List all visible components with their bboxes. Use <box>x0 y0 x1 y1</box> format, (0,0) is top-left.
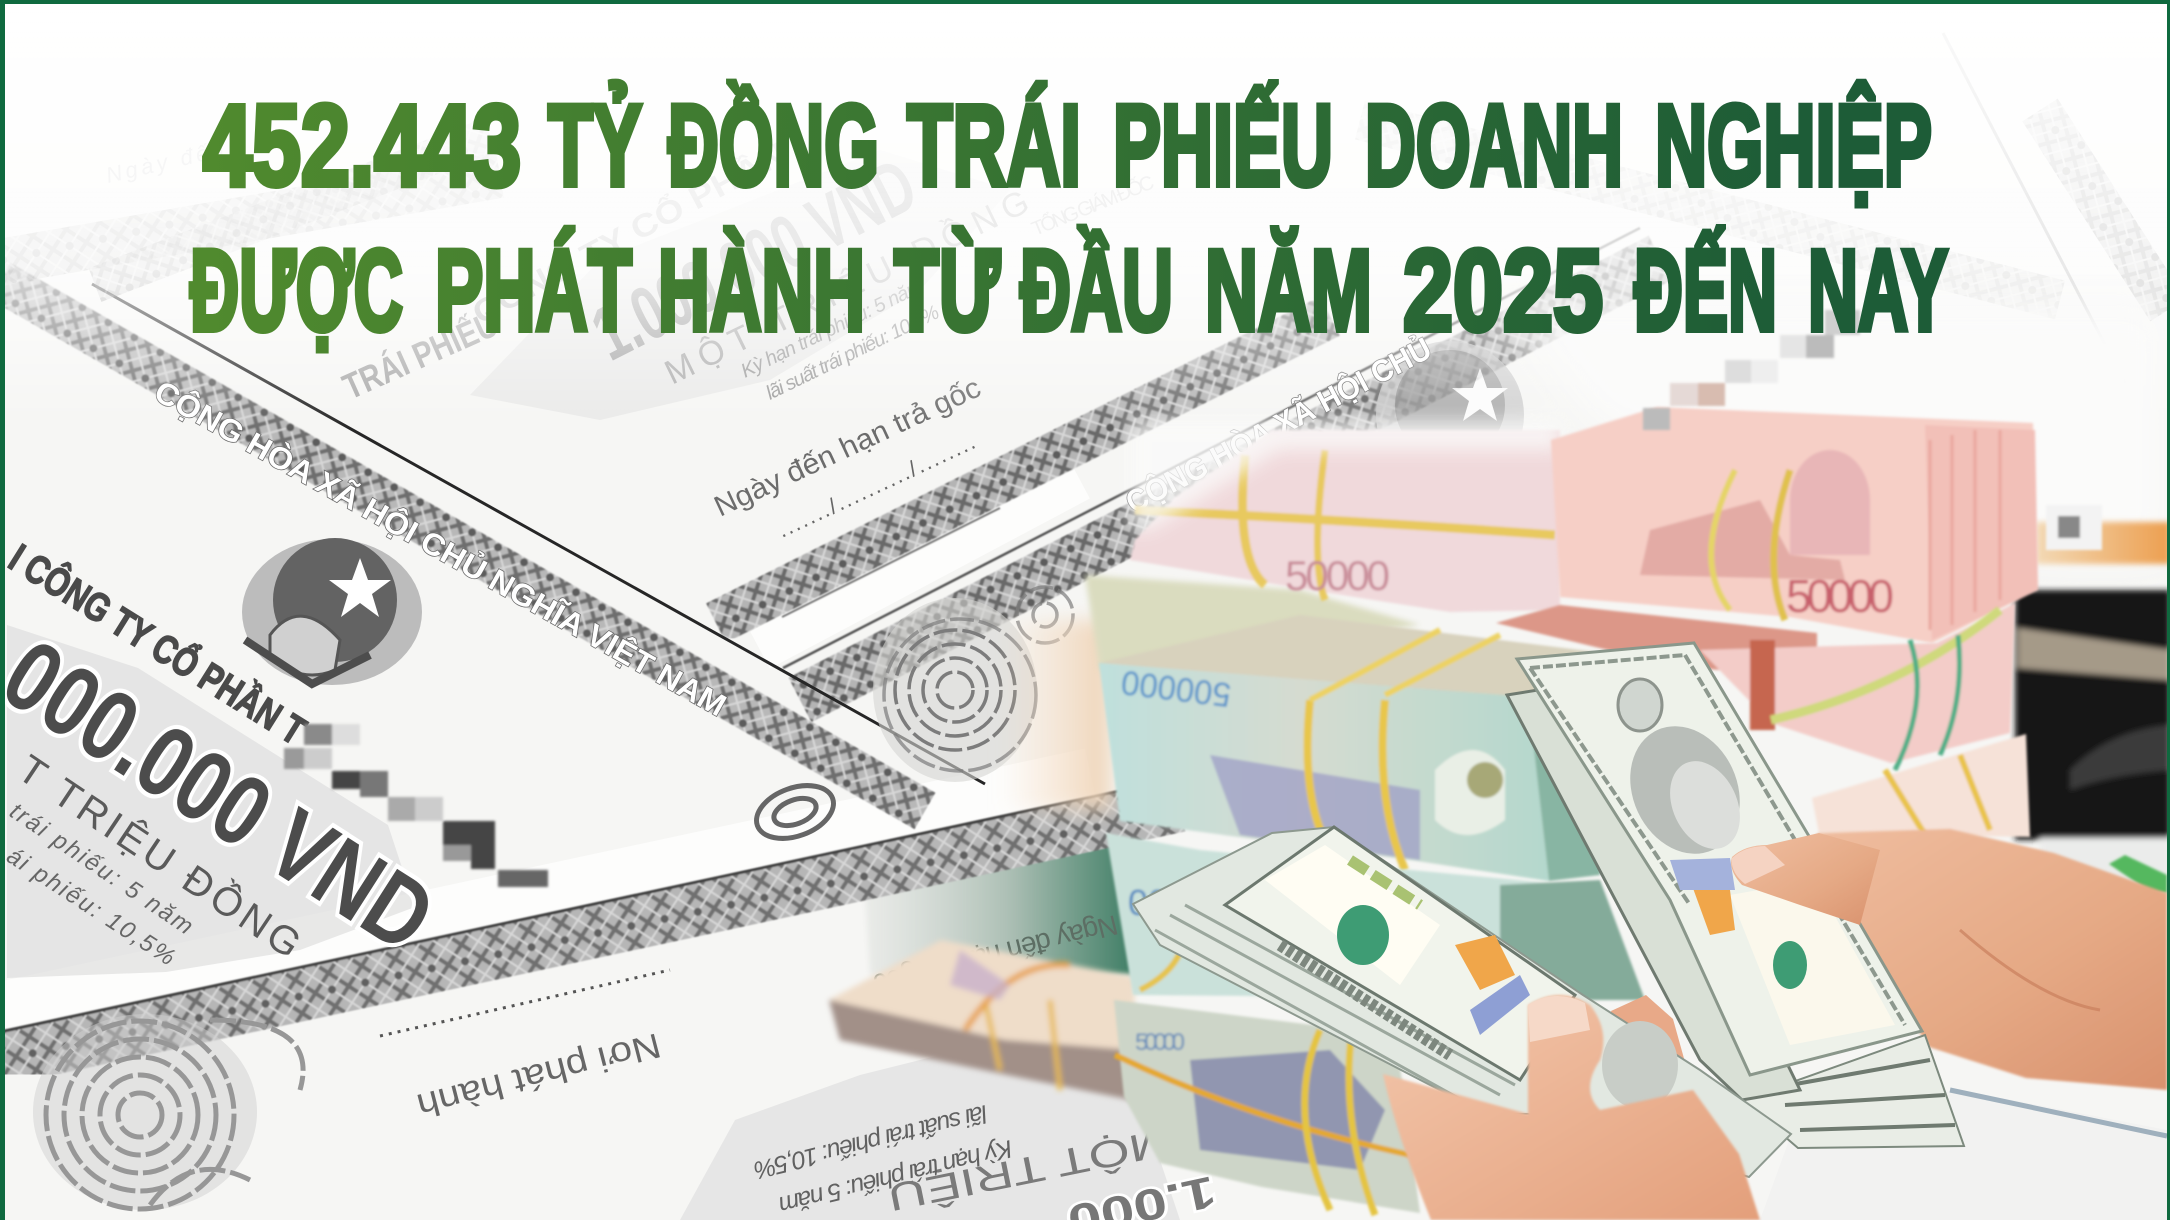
ornament: small seal <box>749 776 841 848</box>
text: lower words upside down: MỘT TRIỆU <box>884 1119 1177 1220</box>
bill: blue ribbon <box>1670 858 1735 890</box>
stack: green seal <box>1337 905 1389 965</box>
bill: green seal <box>1773 941 1807 989</box>
hand: left hand <box>1383 995 1760 1220</box>
overlay: washed top of certificates <box>0 0 2170 430</box>
rosette: lower certificate value <box>680 1040 1180 1220</box>
band: main left guilloche border <box>0 281 925 811</box>
text: maturity date: Ngày đến hạn trả gốc <box>709 372 986 523</box>
stack: edge lines <box>1155 905 1515 1110</box>
text: band motto left: CỘNG HÒA XÃ HỘI CHỦ NGHĨA VIỆT NAM <box>149 373 733 723</box>
object: green item <box>2109 855 2167 893</box>
stack: fine print <box>1280 945 1450 1055</box>
text: upper signature: TỔNG GIÁM ĐỐC <box>1028 170 1157 241</box>
text: upper rate: lãi suất trái phiếu: 10,5% <box>763 301 943 404</box>
stack: green letters <box>1350 860 1420 905</box>
bundle: large teal cash: 500000 <box>1119 663 1233 714</box>
title line 1: NGHIỆP <box>1655 82 1932 210</box>
stack: orange patch <box>1455 935 1515 990</box>
bundle: small pink stack <box>829 940 1135 1100</box>
title line 2: TỪ <box>894 227 1000 355</box>
cash: dollar fan <box>1507 643 1964 1148</box>
bill: orange patch <box>1690 880 1735 935</box>
bundle: blurred peach backdrop <box>1000 620 1110 810</box>
rosette: value background <box>7 625 415 978</box>
stack: cream panel <box>1265 845 1440 985</box>
line: diagonal paper edge <box>92 284 985 784</box>
bill: main bill <box>1517 643 1922 1075</box>
text: face value in words: T TRIỆU ĐỒNG <box>10 745 310 967</box>
hand: right palm <box>1760 829 2167 1090</box>
text: term: trái phiếu: 5 năm <box>5 798 198 940</box>
title line 2: PHÁT <box>435 227 632 355</box>
text: maturity dots: ......./........../........ <box>774 429 979 543</box>
text: due date over stack: Ngày đến hạn trả gốc <box>871 909 1121 1000</box>
bundle: faded dark green stack behind band <box>865 832 1135 975</box>
ornament: lower left swirl <box>33 1014 303 1210</box>
title line 1 <box>203 82 1932 210</box>
emblem: right national emblem <box>1376 341 1524 489</box>
censored blocks: left <box>284 724 548 887</box>
emblem: left national emblem <box>242 538 422 685</box>
strip: white paper margin between upper bands <box>760 480 1080 650</box>
text: issue place: Nơi phát hành <box>413 1025 665 1126</box>
bill: portrait <box>1610 679 1760 872</box>
bundle: top left pink cash: 50000 <box>1285 552 1390 599</box>
title line 2: ĐƯỢC <box>190 227 403 355</box>
bill: back bill <box>1507 680 1800 1100</box>
text: upper company name: CÔNG TY CỔ PHẦN <box>466 135 792 331</box>
title line 1: TRÁI <box>907 82 1081 210</box>
hand: right hand crease <box>1960 930 2100 1010</box>
bundle: lilac cash <box>1114 1000 1420 1215</box>
title line 2: ĐẦU <box>1020 227 1173 355</box>
rosette: upper certificate value <box>470 150 1010 420</box>
stack: portrait <box>1602 1021 1678 1109</box>
bundle: lower pink cash <box>1812 734 2030 837</box>
hand: left hidden finger <box>1611 995 1690 1080</box>
bill: lower white panel <box>1730 880 1895 1045</box>
photo: cash and hands <box>829 300 2170 1220</box>
band: upper guilloche border one <box>716 316 1330 623</box>
bundle: middle pink cash <box>1496 603 2015 770</box>
text: face value: 000.000 VND <box>0 618 453 974</box>
backdrop: small barcode sticker <box>2046 505 2102 550</box>
text: upper certificate label: TRÁI PHIẾU <box>337 303 504 407</box>
bundle: top left pink cash <box>1130 430 1560 612</box>
ornament: centre swirl <box>873 587 1073 782</box>
stack: blue ribbon <box>1470 975 1530 1035</box>
bundle: large teal cash <box>1099 615 1625 881</box>
band: lower guilloche border <box>0 778 1180 1060</box>
title line 2: ĐẾN <box>1634 227 1777 355</box>
text: faint top left term: Ngày đến <box>104 137 226 188</box>
bundle: lilac cash: 50000 <box>1135 1029 1185 1056</box>
title line 1: DOANH <box>1365 82 1623 210</box>
text: upper certificate words: MỘT TRIỆU ĐỒNG <box>659 183 1035 392</box>
title line 1: 452.443 <box>203 82 521 210</box>
hand: right thumbnail <box>1732 846 1785 884</box>
title line 2: NĂM <box>1205 227 1372 355</box>
title line 1: PHIẾU <box>1113 82 1333 210</box>
band: upper guilloche border two <box>783 228 1660 700</box>
band: faint top bands <box>0 33 2168 383</box>
bill: lower bills <box>1742 1035 1964 1148</box>
dotted line: issue place <box>380 970 670 1036</box>
bundle: back green cash <box>1085 575 1420 670</box>
text: lower term upside down: Kỳ hạn trái phiếu: 5 năm <box>776 1134 1015 1219</box>
text: company name: I CÔNG TY CỔ PHẦN T <box>1 534 314 754</box>
hand: right thumb over bills <box>1731 833 1880 925</box>
table: paper edge <box>1950 1090 2167 1136</box>
title <box>190 82 1948 355</box>
title line 2: NAY <box>1808 227 1948 355</box>
stack: top bill <box>1225 827 1575 1080</box>
soft fade on top of left pink cash <box>1130 420 1560 530</box>
title line 1: TỶ <box>548 82 642 210</box>
cash: dollar stack in left hand <box>1133 827 1791 1177</box>
bundle: top right pink cash <box>1551 407 2038 643</box>
title line 2: 2025 <box>1403 227 1603 355</box>
bill: inner frame lines <box>1530 655 1905 1025</box>
text: rate: ái phiếu: 10,5% <box>2 842 180 971</box>
bundle: second teal cash <box>1106 833 1645 1000</box>
censored blocks: right <box>1643 310 1860 430</box>
bundle: top right pink cash: 50000 <box>1786 570 1894 622</box>
backdrop: table stripe and dark object <box>2015 522 2170 898</box>
text: upper term: Kỳ hạn trái phiếu: 5 năm <box>738 275 927 382</box>
text: upper certificate value: 1.000.000 VND <box>579 143 930 377</box>
title line 2: HÀNH <box>658 227 865 355</box>
stack: paper edges <box>1133 827 1791 1177</box>
strip: white paper margin above lower band <box>0 772 1090 1006</box>
bundle: second teal cash: 0000 <box>1128 882 1208 923</box>
table: paper surface <box>1760 1090 2167 1220</box>
title line 2 <box>190 227 1948 355</box>
backdrop: soft white behind money <box>1500 300 2170 560</box>
title line 1: ĐỒNG <box>668 82 879 210</box>
hand: left thumbnail <box>1528 996 1590 1042</box>
text: lower rate upside down: lãi suất trái phiếu: 10,5% <box>751 1099 990 1184</box>
text: band motto right: CỘNG HÒA XÃ HỘI CHỦ <box>1119 330 1437 520</box>
